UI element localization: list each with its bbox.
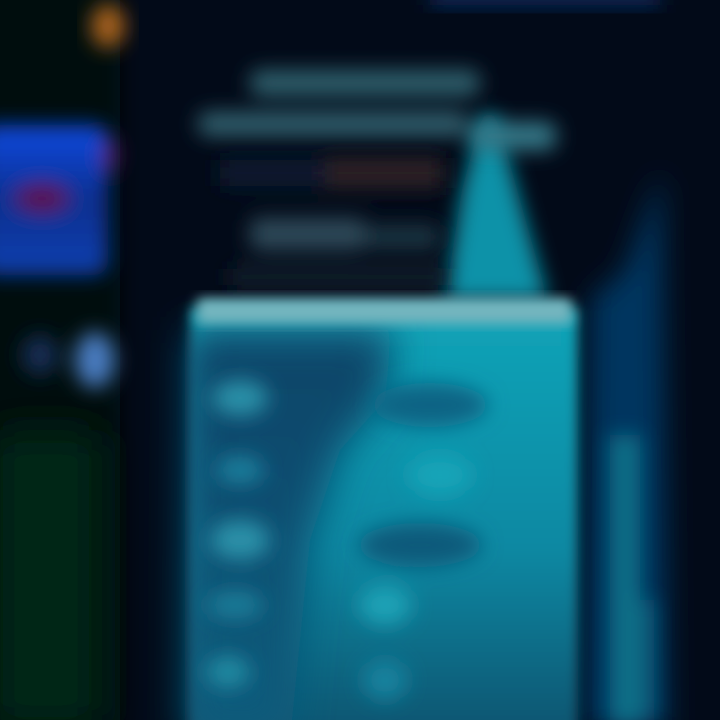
subheading bars [220, 158, 445, 286]
icon: pale blue dots [22, 332, 115, 388]
main table panel [185, 298, 578, 720]
header band [197, 298, 572, 324]
heading lines [198, 70, 556, 150]
left column dark area [185, 330, 392, 720]
left sidebar [0, 0, 125, 720]
right chart: dark blue peak [585, 170, 668, 720]
teal peak [445, 115, 548, 300]
top blue strip [430, 0, 660, 6]
icon: orange dot [91, 4, 125, 48]
row labels [206, 380, 270, 688]
right chart: light bar [610, 435, 654, 720]
row values [358, 383, 488, 700]
blue block [0, 125, 117, 275]
green block [0, 430, 102, 720]
